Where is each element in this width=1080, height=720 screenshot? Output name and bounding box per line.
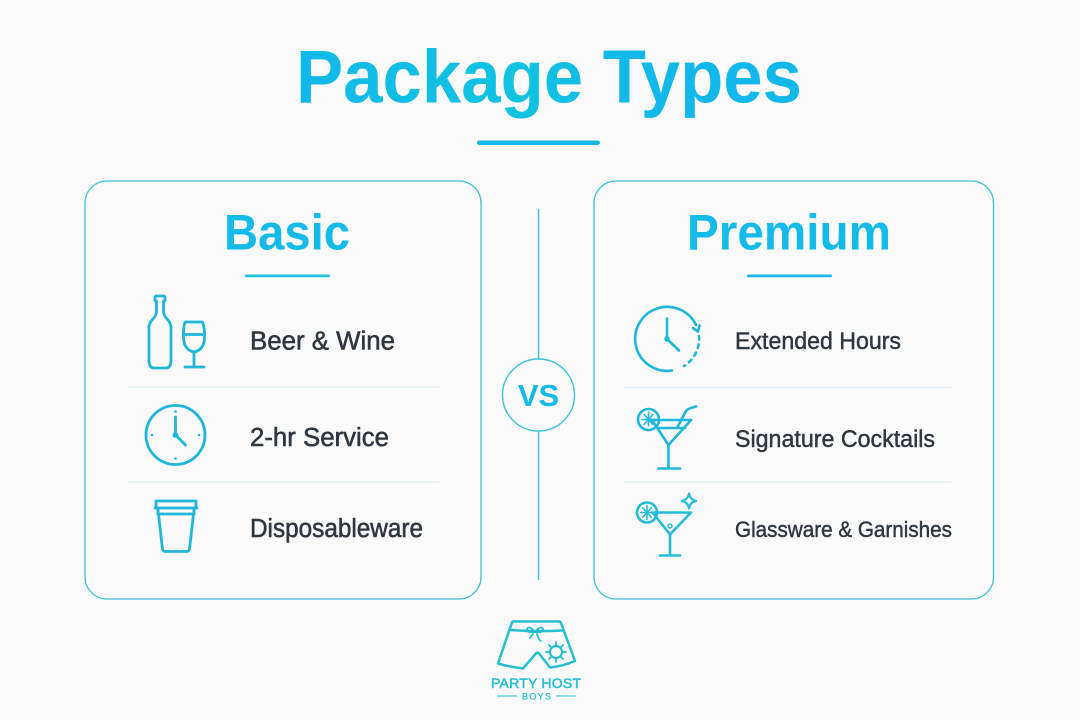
logo subtext: BOYS <box>522 692 551 702</box>
icon: signature cocktail <box>638 406 696 468</box>
icon: garnished glass <box>637 494 696 556</box>
logo: party host boys <box>491 622 581 702</box>
heading underline: premium <box>747 274 832 277</box>
icon: extended hours clock <box>635 307 700 371</box>
label: disposableware: Disposableware <box>250 515 423 543</box>
icon: clock <box>146 406 205 464</box>
title underline <box>477 140 600 145</box>
label: glassware and garnishes: Glassware & Garnishes <box>735 517 952 542</box>
heading: basic: Basic <box>224 204 350 260</box>
icon: beer bottle and wine glass <box>149 296 205 368</box>
icon: disposable cup <box>155 501 197 552</box>
panel: basic <box>85 181 481 599</box>
panel: premium <box>594 181 994 599</box>
logo wordmark: PARTY HOST <box>491 675 581 691</box>
vs badge: VS <box>518 378 559 413</box>
title: Package Types <box>296 34 802 118</box>
icon: swim shorts <box>498 622 575 668</box>
logo subtext rules <box>497 695 576 697</box>
label: extended hours: Extended Hours <box>735 328 901 355</box>
label: 2-hr service: 2-hr Service <box>250 424 389 452</box>
center divider line <box>538 209 540 580</box>
label: beer and wine: Beer & Wine <box>250 327 395 355</box>
heading: premium: Premium <box>687 204 891 260</box>
row divider <box>624 387 952 388</box>
row divider <box>127 386 440 388</box>
row divider <box>624 482 952 483</box>
label: signature cocktails: Signature Cocktails <box>735 426 935 453</box>
vs badge <box>502 359 574 431</box>
row divider <box>127 482 440 483</box>
heading underline: basic <box>245 274 330 277</box>
